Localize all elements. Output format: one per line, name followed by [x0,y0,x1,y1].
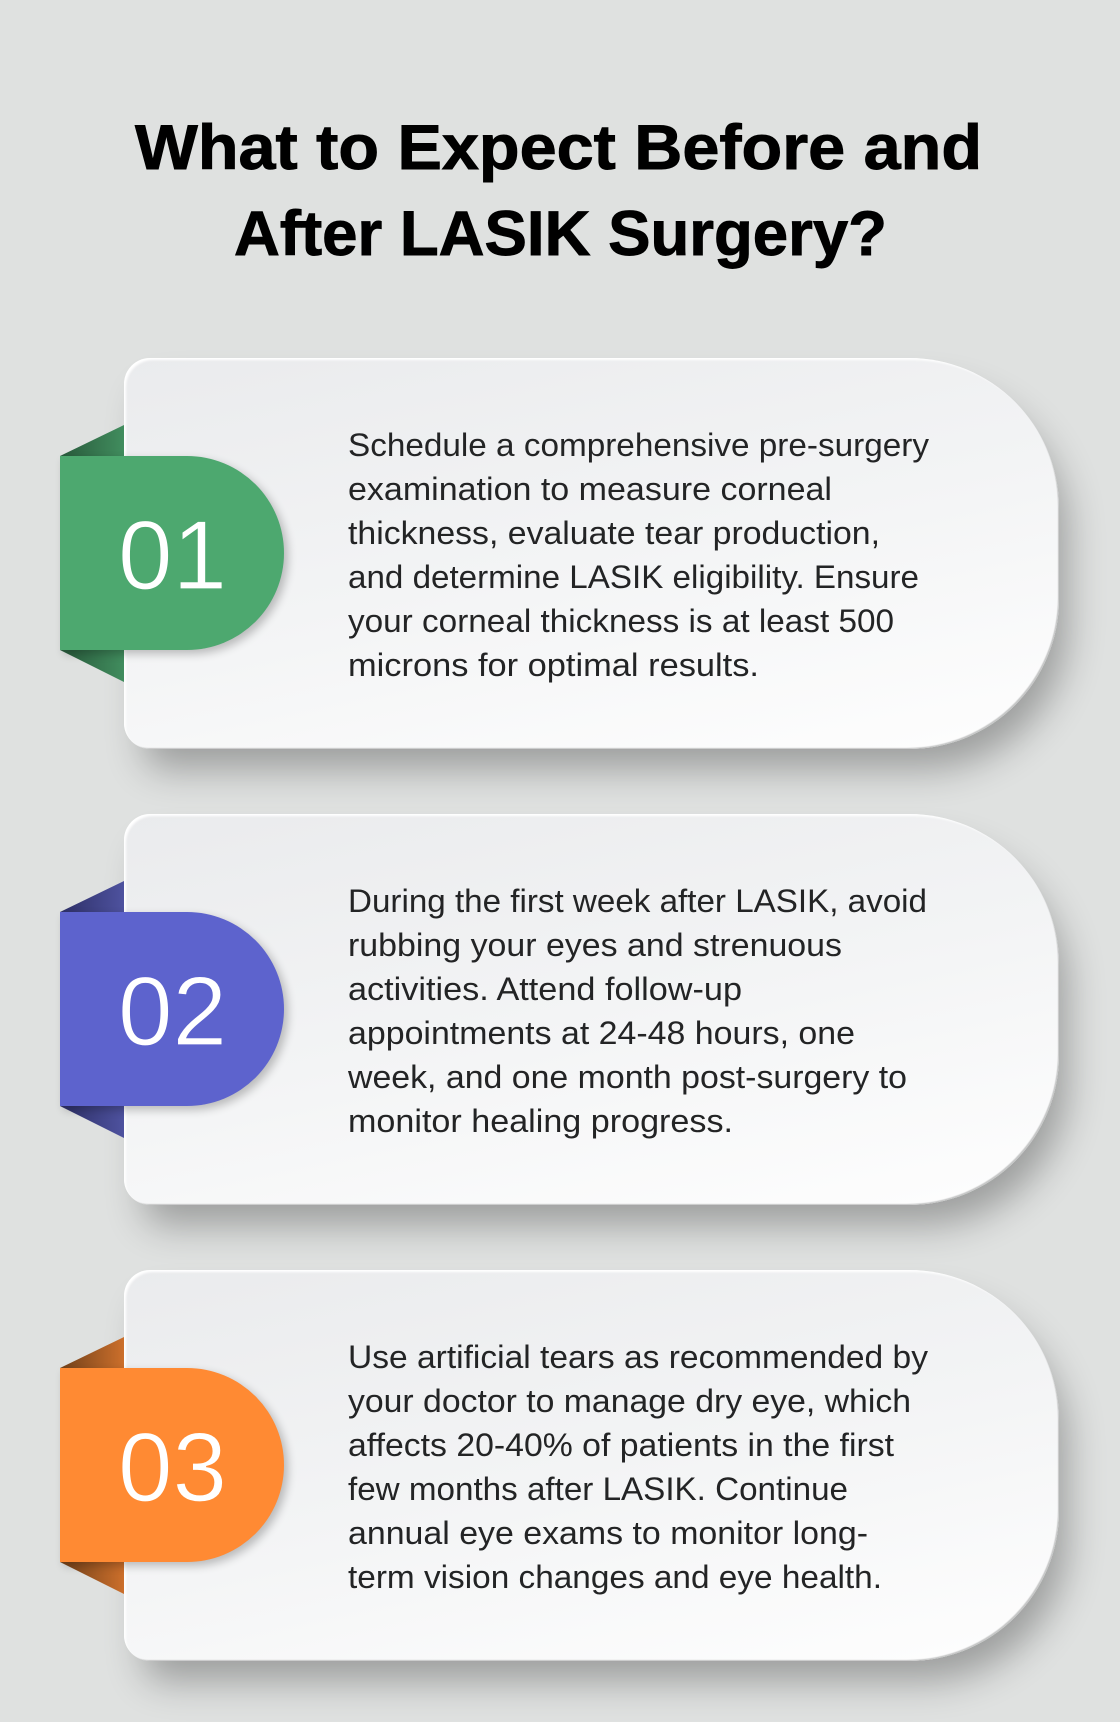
step number and text: your corneal thickness is at least 500 [348,603,894,639]
step number and text: monitor healing progress. [348,1103,733,1139]
panel: step 1 [60,358,1088,790]
panel: step 2 [60,814,1088,1246]
ribbon folds [60,1337,124,1594]
step number and text [118,1339,929,1595]
step number and text: Use artificial tears as recommended by [348,1339,929,1375]
number tab [60,1368,284,1562]
card background [124,814,1059,1205]
step number and text: activities. Attend follow-up [348,971,742,1007]
panel: step 3 [60,1270,1088,1702]
step number and text: 01 [118,500,227,610]
title: After LASIK Surgery? [234,199,887,269]
title: What to Expect Before and [135,113,982,183]
step number and text: Schedule a comprehensive pre-surgery [348,427,930,463]
step number and text: examination to measure corneal [348,471,832,507]
ribbon folds [60,425,124,682]
step number and text: rubbing your eyes and strenuous [348,927,842,963]
step number and text: and determine LASIK eligibility. Ensure [348,559,919,595]
number tab [60,912,284,1106]
step number and text: 02 [118,956,227,1066]
title [134,113,982,269]
step number and text [118,883,927,1139]
step number and text: annual eye exams to monitor long- [348,1515,868,1551]
step number and text: term vision changes and eye health. [348,1559,882,1595]
step number and text: affects 20-40% of patients in the first [348,1427,894,1463]
card background [124,358,1059,749]
step number and text: thickness, evaluate tear production, [348,515,880,551]
step number and text [118,427,930,683]
step number and text: week, and one month post-surgery to [347,1059,907,1095]
ribbon folds [60,881,124,1138]
step number and text: appointments at 24-48 hours, one [348,1015,855,1051]
step number and text: During the first week after LASIK, avoid [348,883,927,919]
card background [124,1270,1059,1661]
step number and text: your doctor to manage dry eye, which [348,1383,911,1419]
number tab [60,456,284,650]
step number and text: few months after LASIK. Continue [348,1471,848,1507]
step number and text: 03 [118,1412,227,1522]
step number and text: microns for optimal results. [348,647,759,683]
